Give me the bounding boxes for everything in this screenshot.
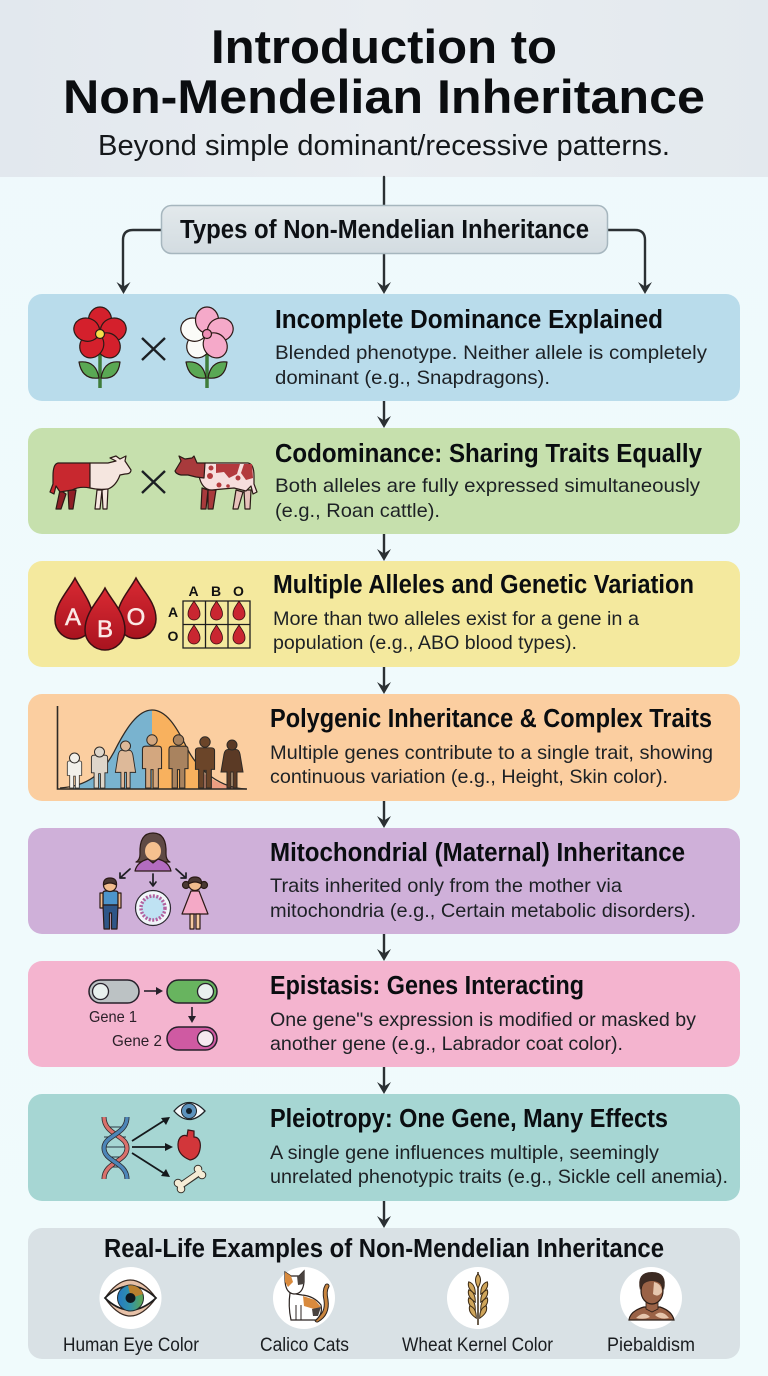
heading: Pleiotropy: One Gene, Many Effects (270, 1105, 668, 1133)
example: calico cats (260, 1267, 349, 1356)
icon: DNA helix (103, 1117, 127, 1179)
description (270, 1142, 728, 1188)
description: One gene"s expression is modified or masked by (270, 1009, 696, 1031)
icon: roan cow (175, 456, 257, 509)
heading: Incomplete Dominance Explained (275, 306, 663, 334)
chart: Punnett square: B (211, 583, 221, 599)
heading: Codominance: Sharing Traits Equally (275, 440, 703, 468)
chart: Punnett square: O (233, 583, 244, 599)
panel: mitochondrial inheritance (28, 828, 740, 934)
description: unrelated phenotypic traits (e.g., Sickle cell anemia). (270, 1166, 728, 1188)
heading: Polygenic Inheritance & Complex Traits (270, 705, 712, 733)
example: piebaldism: Piebaldism (607, 1335, 695, 1356)
types heading box (162, 206, 608, 254)
description (275, 342, 707, 389)
icon: blood drops: A (65, 604, 81, 631)
description: mitochondria (e.g., Certain metabolic disorders). (270, 900, 696, 922)
subtitle: Beyond simple dominant/recessive patterns. (98, 130, 670, 162)
panel: codominance (28, 428, 740, 534)
panel: pleiotropy (28, 1094, 740, 1201)
chart: Punnett square: A (168, 604, 178, 620)
icon: blood drops: B (97, 616, 113, 643)
chart: bell curve with people (58, 706, 247, 789)
panel: multiple alleles (28, 561, 740, 667)
icon: mother (135, 833, 171, 871)
description (270, 875, 696, 922)
connector arrows from types box (116, 177, 652, 294)
example: human eye color (63, 1267, 200, 1356)
types heading box: Types of Non-Mendelian Inheritance (180, 216, 589, 244)
panel: epistasis (28, 961, 740, 1067)
description: Blended phenotype. Neither allele is completely (275, 342, 707, 364)
example: wheat kernel color (402, 1267, 554, 1356)
description (270, 1009, 696, 1055)
description: Traits inherited only from the mother via (270, 875, 622, 897)
description: More than two alleles exist for a gene in a (273, 608, 639, 630)
heading: Epistasis: Genes Interacting (270, 972, 584, 1000)
title: Introduction to (211, 20, 557, 73)
chart: Punnett square: O (168, 628, 179, 644)
description: Both alleles are fully expressed simultaneously (275, 475, 700, 497)
flow arrows between panels (377, 401, 391, 1228)
panel: real-life examples (28, 1228, 740, 1359)
description: population (e.g., ABO blood types). (273, 632, 577, 654)
description: (e.g., Roan cattle). (275, 500, 440, 522)
icon: cross symbol (142, 338, 165, 360)
icon: daughter (182, 877, 208, 929)
heading: Multiple Alleles and Genetic Variation (273, 571, 694, 599)
description: continuous variation (e.g., Height, Skin color). (270, 766, 668, 788)
example: calico cats: Calico Cats (260, 1335, 349, 1356)
icon: blood drops: O (127, 604, 145, 631)
panel: polygenic inheritance (28, 694, 740, 801)
description (275, 475, 700, 522)
panel: incomplete dominance (28, 294, 740, 401)
example: wheat kernel color: Wheat Kernel Color (402, 1335, 554, 1356)
icon: heart (178, 1130, 200, 1160)
chart: Punnett square: A (188, 583, 199, 599)
icon: son (100, 878, 121, 929)
icon: gene switches: Gene 2 (112, 1033, 162, 1050)
title (63, 20, 705, 123)
icon: mitochondrion (136, 890, 170, 926)
icon: gene switches: Gene 1 (89, 1009, 137, 1026)
description (273, 608, 639, 654)
icon: gene switches (89, 980, 217, 1050)
description: dominant (e.g., Snapdragons). (275, 367, 550, 389)
icon: effect arrows (132, 1117, 173, 1177)
heading: Real-Life Examples of Non-Mendelian Inheritance (104, 1235, 664, 1263)
description: another gene (e.g., Labrador coat color). (270, 1033, 623, 1055)
chart: Punnett square (168, 583, 250, 648)
example: human eye color: Human Eye Color (63, 1335, 200, 1356)
icon: pink and white flower (178, 307, 236, 388)
heading: Mitochondrial (Maternal) Inheritance (270, 839, 685, 867)
icon: blood drops (55, 578, 156, 650)
icon: red and white cow (50, 456, 131, 509)
icon: inheritance arrows (120, 869, 186, 886)
description: A single gene influences multiple, seemingly (270, 1142, 659, 1164)
icon: eye (174, 1102, 205, 1120)
icon: cross symbol (142, 471, 165, 493)
icon: red flower (71, 307, 129, 388)
example: piebaldism (607, 1267, 695, 1356)
description: Multiple genes contribute to a single trait, showing (270, 742, 713, 764)
title: Non-Mendelian Inheritance (63, 70, 705, 123)
header band (0, 0, 768, 177)
description (270, 742, 713, 788)
icon: bone (174, 1165, 206, 1193)
